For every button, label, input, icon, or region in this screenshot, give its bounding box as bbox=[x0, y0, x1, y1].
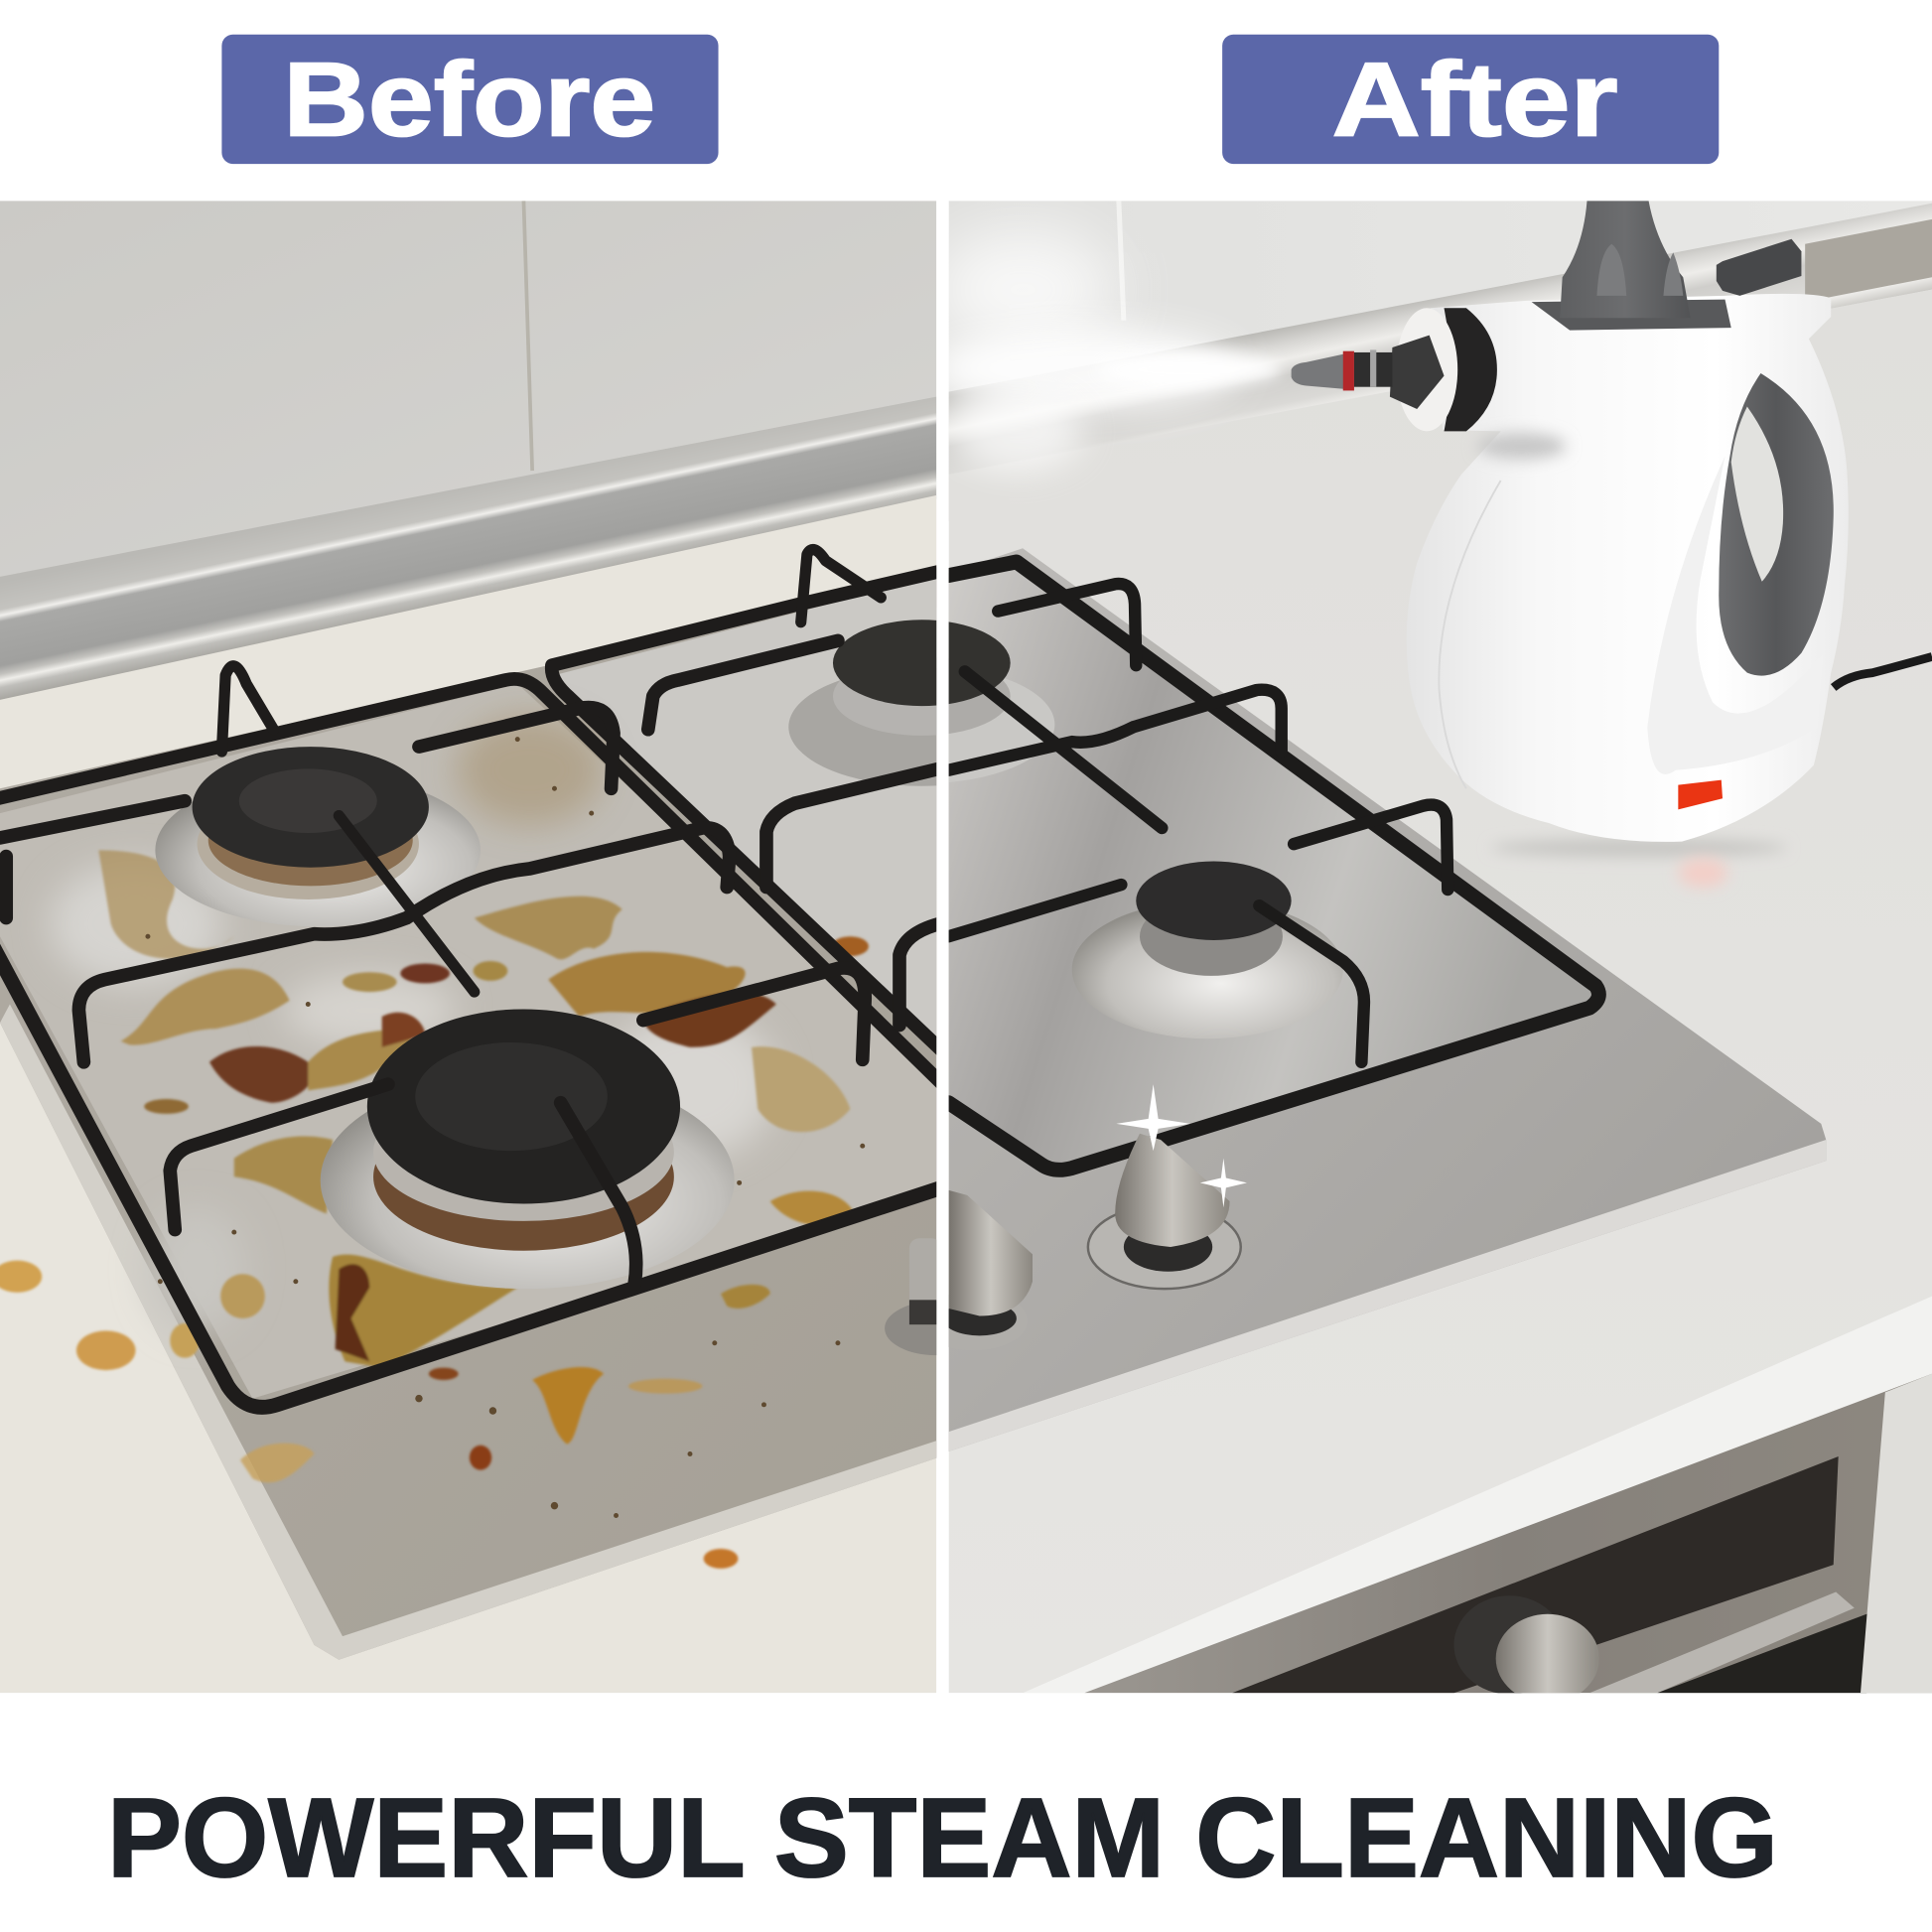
steamer seam bbox=[1439, 481, 1501, 788]
clean knobs bbox=[919, 1134, 1241, 1350]
badge: After bbox=[1222, 35, 1719, 164]
sparkle bbox=[1116, 1084, 1247, 1207]
clean burner front bbox=[1072, 862, 1343, 1038]
badge: Before bbox=[221, 35, 719, 164]
steamer handle bbox=[1719, 373, 1834, 676]
steamer nozzle disc bbox=[1396, 308, 1457, 431]
clean wall bbox=[949, 201, 1932, 521]
counter front edge bbox=[1023, 1297, 1932, 1693]
handle opening bbox=[1731, 407, 1783, 582]
grease stains bbox=[0, 850, 869, 1569]
clean burner rear bbox=[949, 621, 1054, 782]
cooktop plate dirty bbox=[0, 564, 949, 1660]
steamer bbox=[1292, 201, 1849, 842]
badge: Before: Before bbox=[283, 43, 655, 159]
steamer shadow bbox=[1491, 839, 1787, 857]
metal wall strip clean bbox=[949, 204, 1932, 475]
strip right shaded end bbox=[1805, 219, 1932, 302]
clean counter bbox=[949, 290, 1932, 1693]
steamer top knob bbox=[1560, 201, 1691, 318]
title: POWERFUL STEAM CLEANING bbox=[107, 1775, 1778, 1900]
oven front bbox=[1084, 1374, 1932, 1703]
steamer collar bbox=[1445, 308, 1497, 431]
metal wall strip bbox=[0, 397, 936, 705]
grates dirty side bbox=[0, 550, 973, 1407]
steam cloud bbox=[930, 228, 1282, 471]
steamer shade bbox=[1477, 433, 1566, 460]
clean cooktop plate bbox=[949, 548, 1826, 1451]
knob dirty side bbox=[885, 1239, 937, 1355]
badge: After: After bbox=[1332, 43, 1618, 159]
panel: after photo bbox=[949, 201, 1932, 1694]
burner: rear left dirty bbox=[155, 747, 481, 926]
steamer inner panel bbox=[1648, 458, 1757, 774]
burner: front left dirty bbox=[321, 1009, 735, 1289]
clean grates bbox=[949, 562, 1598, 1170]
steamer lid recess bbox=[1532, 300, 1731, 331]
counter bbox=[0, 495, 936, 1693]
power light bbox=[1678, 780, 1723, 809]
light reflection bbox=[1678, 858, 1727, 888]
power cord bbox=[1834, 656, 1932, 688]
panel: before photo bbox=[0, 201, 937, 1693]
steamer nozzle bbox=[1292, 336, 1445, 409]
speckles bbox=[145, 737, 865, 1518]
steamer body bbox=[1407, 294, 1849, 842]
burner: rear right half dirty side bbox=[788, 620, 937, 786]
steamer button bbox=[1717, 239, 1801, 296]
tiled wall bbox=[0, 201, 936, 608]
